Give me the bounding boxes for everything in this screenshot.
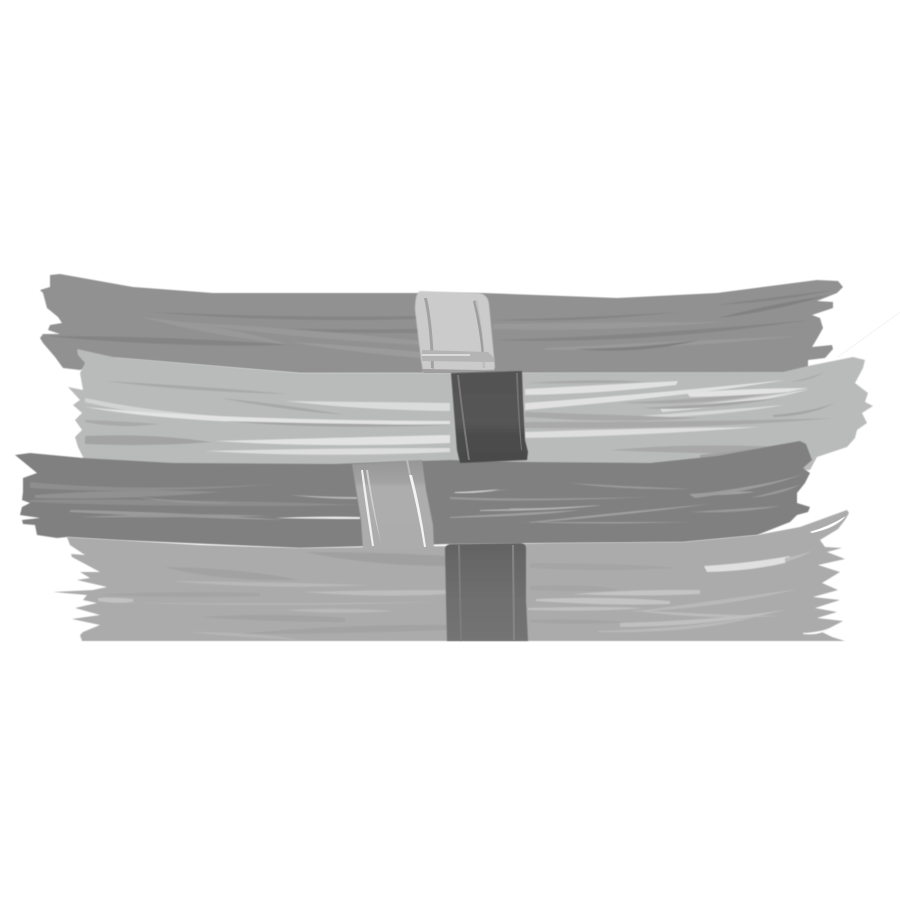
paper band 4: dark bottom — [445, 543, 528, 641]
paper band 3: translucent light — [352, 460, 434, 550]
paper sheet 1: top — [40, 274, 843, 373]
paper sheet 3: dark — [15, 441, 812, 548]
faint stray line — [838, 312, 900, 357]
paper band 2: dark — [451, 371, 528, 463]
paper sheet 4: bottom with jagged edges — [53, 510, 849, 641]
paper sheet 2: light — [68, 349, 873, 470]
paper band 1: light — [415, 291, 495, 373]
white gap highlight — [810, 516, 846, 533]
